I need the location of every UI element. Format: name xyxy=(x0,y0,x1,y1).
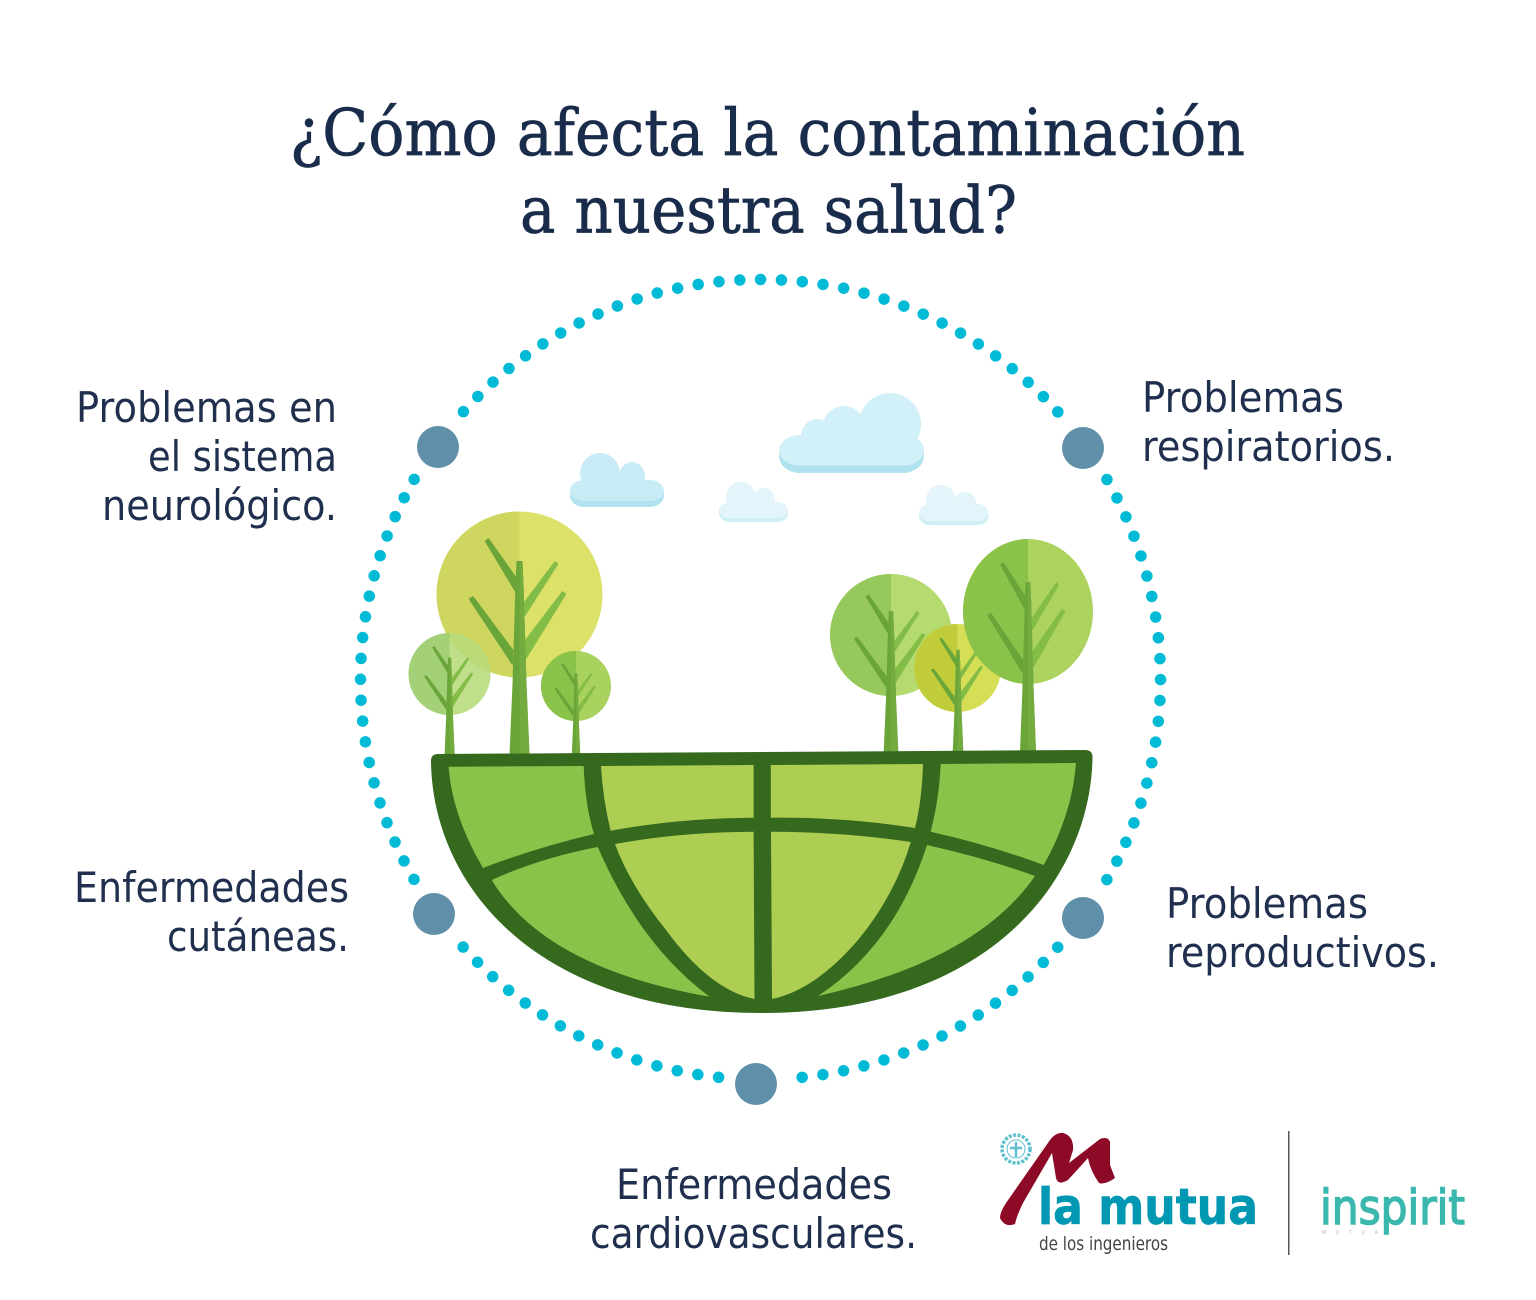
label: skin xyxy=(74,863,349,961)
label: respiratory: Problemas xyxy=(1142,373,1344,422)
tree: left centre small xyxy=(541,651,611,754)
tree: right tall xyxy=(963,539,1093,751)
title xyxy=(290,96,1245,248)
tree: large yellow xyxy=(436,512,602,754)
tree: right medium xyxy=(830,574,952,752)
logo: inspirit: MUTUA xyxy=(1322,1230,1379,1236)
label: skin: Enfermedades xyxy=(74,863,349,912)
label: reproductive: Problemas xyxy=(1166,879,1368,928)
logo wordmark: la mutua xyxy=(1038,1178,1258,1236)
ring nodes xyxy=(403,416,1114,1115)
tree: right yellow xyxy=(914,624,1001,752)
label: neurological: Problemas en xyxy=(76,383,337,432)
cloud: large xyxy=(779,393,924,473)
globe xyxy=(431,750,1092,1013)
label: cardiovascular: Enfermedades xyxy=(616,1160,892,1209)
label: neurological: el sistema xyxy=(148,432,337,481)
cloud: left xyxy=(570,453,664,507)
logo red M xyxy=(1000,1133,1115,1225)
label: reproductive: reproductivos. xyxy=(1166,928,1439,977)
label: cardiovascular xyxy=(590,1160,917,1258)
logo tagline: de los ingenieros xyxy=(1039,1233,1168,1255)
logo emblem xyxy=(1002,1135,1030,1163)
label: reproductive xyxy=(1166,879,1439,977)
tree: left small xyxy=(408,633,490,754)
title: ¿Cómo afecta la contaminación xyxy=(290,96,1245,171)
cloud: small right xyxy=(919,485,988,525)
label: respiratory xyxy=(1142,373,1395,471)
dotted ring xyxy=(360,280,1160,1080)
title: a nuestra salud? xyxy=(520,174,1017,248)
label: respiratory: respiratorios. xyxy=(1142,422,1395,471)
cloud: small centre xyxy=(719,482,788,522)
logo: la mutua xyxy=(1000,1133,1258,1255)
logo: inspirit: inspirit xyxy=(1320,1180,1465,1236)
label: cardiovascular: cardiovasculares. xyxy=(590,1209,917,1258)
label: neurological: neurológico. xyxy=(102,481,337,530)
logo divider xyxy=(1288,1131,1290,1255)
label: neurological xyxy=(76,383,337,530)
label: skin: cutáneas. xyxy=(167,912,349,961)
